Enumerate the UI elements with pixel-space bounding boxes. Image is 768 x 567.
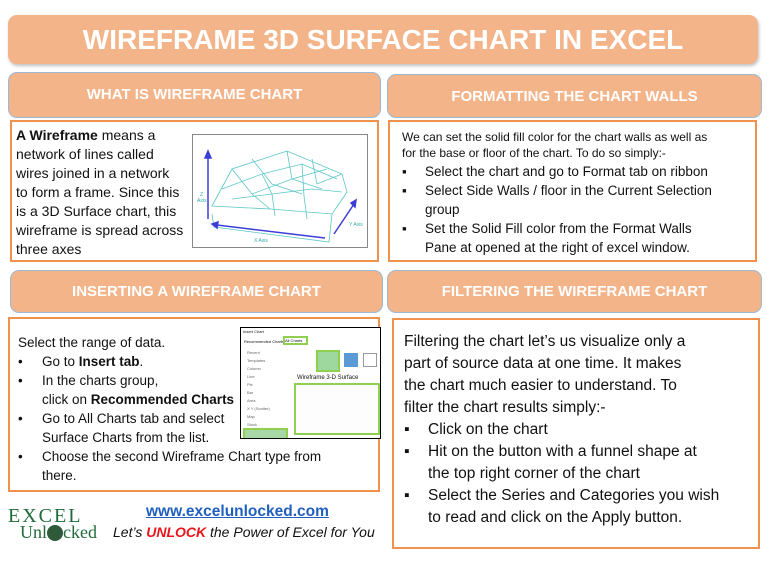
text block: filtering: Hit on the button with a funnel shape at — [428, 443, 697, 460]
panel: inserting — [8, 317, 380, 492]
list: insert steps: click on Recommended Charts — [42, 392, 234, 407]
text block: filtering: ▪ — [404, 487, 410, 504]
panel: formatting chart walls — [388, 120, 757, 262]
heading: inserting a wireframe chart — [10, 270, 383, 313]
image: insert chart dialog: Stock — [247, 422, 257, 427]
image: insert chart dialog: Map — [247, 414, 255, 419]
chart: wireframe surface image — [192, 134, 368, 248]
image: insert chart dialog: Insert Chart — [243, 329, 264, 334]
text block: filtering: Click on the chart — [428, 421, 548, 438]
text block: walls intro: for the base or floor of the chart. To do so simply:- — [402, 146, 666, 160]
list: insert steps: Choose the second Wireframe Chart type from — [42, 449, 321, 464]
image: insert chart dialog: Templates — [247, 358, 265, 363]
text block: definition: wires joined in a network — [16, 165, 169, 181]
text block: walls intro: We can set the solid fill color for the chart walls as well as — [402, 130, 707, 144]
text block: definition: A Wireframe means a — [16, 127, 155, 143]
list: walls steps: ▪ — [402, 164, 407, 179]
chart: wireframe surface image: Axis — [197, 198, 207, 204]
image: insert chart dialog: Bar — [247, 390, 253, 395]
logo: excel unlocked: EXCEL — [8, 505, 82, 527]
chart: wireframe surface image: Y Axis — [349, 222, 363, 228]
text block: filtering: filter the chart results simply:- — [404, 399, 606, 416]
image: insert chart dialog: Line — [247, 374, 255, 379]
text: tagline: Let’s UNLOCK the Power of Excel for You — [113, 524, 375, 540]
heading: inserting a wireframe chart: INSERTING A WIREFRAME CHART — [72, 283, 321, 300]
text: website url: www.excelunlocked.com — [146, 503, 329, 520]
text block: filtering: Filtering the chart let’s us visualize only a — [404, 333, 685, 350]
panel: what is wireframe chart — [10, 120, 379, 262]
list: insert steps: Surface Charts from the list. — [42, 430, 209, 445]
image: insert chart dialog: Area — [247, 398, 255, 403]
list: walls steps: ▪ — [402, 221, 407, 236]
text block: definition: wireframe is spread across — [16, 222, 183, 238]
list: insert steps: there. — [42, 468, 77, 483]
panel: filtering — [392, 318, 760, 549]
text block: definition — [16, 127, 183, 257]
logo: excel unlocked: Unl cked — [20, 522, 97, 542]
heading: filtering: FILTERING THE WIREFRAME CHART — [442, 283, 707, 300]
title: WIREFRAME 3D SURFACE CHART IN EXCEL — [83, 24, 683, 55]
list: walls steps: Pane at opened at the right of excel window. — [425, 240, 690, 255]
text block: definition: is a 3D Surface chart, this — [16, 203, 176, 219]
image: insert chart dialog — [240, 327, 381, 439]
image: insert chart dialog: Recommended Charts — [244, 339, 284, 344]
chart: wireframe surface image: X Axis — [254, 238, 268, 244]
list: insert steps — [18, 335, 321, 483]
list: walls steps: Set the Solid Fill color from the Format Walls — [425, 221, 692, 236]
list: walls steps: Select Side Walls / floor in the Current Selection — [425, 183, 712, 198]
image: insert chart dialog: Column — [247, 366, 261, 371]
text block: definition: network of lines called — [16, 146, 154, 162]
text block: definition: three axes — [16, 241, 81, 257]
text block: filtering: the top right corner of the chart — [428, 465, 640, 482]
text block: filtering: the chart much easier to understand. To — [404, 377, 677, 394]
list: insert steps: Go to All Charts tab and select — [42, 411, 224, 426]
image: insert chart dialog: Recent — [247, 350, 260, 355]
list: walls steps — [402, 164, 712, 255]
list: walls steps: group — [425, 202, 460, 217]
heading: formatting chart walls — [387, 74, 762, 118]
text block: filtering: Select the Series and Categories you wish — [428, 487, 719, 504]
text block: walls intro — [402, 130, 707, 160]
list: insert steps: Select the range of data. — [18, 335, 165, 350]
heading: what is wireframe chart: WHAT IS WIREFRAME CHART — [87, 86, 302, 103]
list: insert steps: In the charts group, — [42, 373, 158, 388]
text block: filtering — [404, 333, 719, 526]
heading: formatting chart walls: FORMATTING THE CHART WALLS — [451, 88, 698, 105]
list: insert steps: • — [18, 354, 23, 369]
text block: filtering: to read and click on the Apply button. — [428, 509, 682, 526]
text block: filtering: ▪ — [404, 443, 410, 460]
list: walls steps: ▪ — [402, 183, 407, 198]
image: insert chart dialog: X Y (Scatter) — [247, 406, 270, 411]
heading: what is wireframe chart — [8, 72, 381, 118]
title — [8, 15, 758, 64]
heading: filtering — [387, 270, 762, 313]
image: insert chart dialog: Wireframe 3-D Surface — [297, 375, 358, 381]
image: insert chart dialog: Pie — [247, 382, 253, 387]
list: insert steps: • — [18, 449, 23, 464]
image: insert chart dialog: All Charts — [285, 338, 302, 343]
chart: wireframe surface image: Z — [200, 192, 203, 198]
text block: filtering: part of source data at one time. It makes — [404, 355, 681, 372]
list: insert steps: • — [18, 411, 23, 426]
logo: excel unlocked — [8, 505, 97, 542]
text block: definition: to form a frame. Since this — [16, 184, 179, 200]
text block: filtering: ▪ — [404, 421, 410, 438]
list: insert steps: Go to Insert tab. — [42, 354, 143, 369]
list: walls steps: Select the chart and go to Format tab on ribbon — [425, 164, 708, 179]
list: insert steps: • — [18, 373, 23, 388]
